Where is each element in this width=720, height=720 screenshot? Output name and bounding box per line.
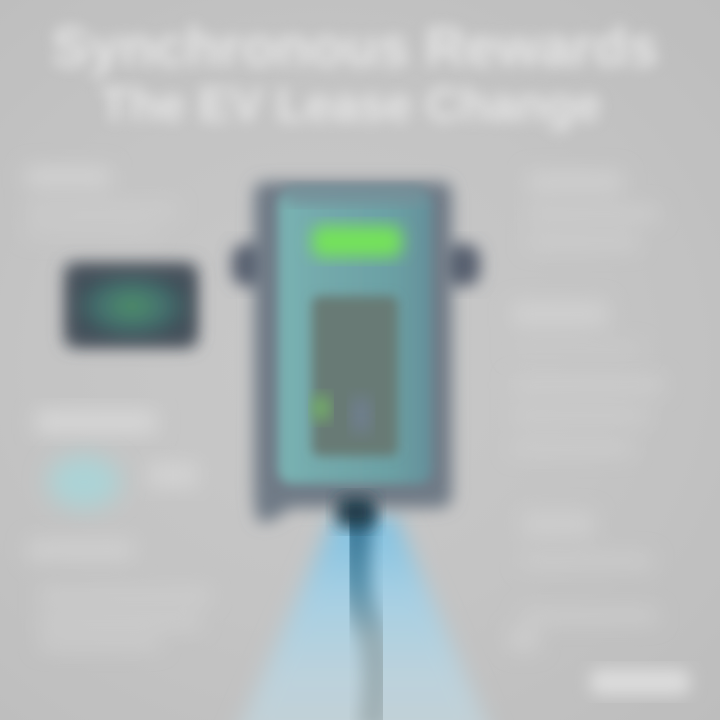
charging cable xyxy=(356,505,377,720)
right column: text block two xyxy=(512,302,642,355)
left column: stat label xyxy=(148,462,198,488)
right column: text block four xyxy=(510,512,657,650)
icon: pale teal gauge xyxy=(48,456,120,508)
title: The EV Lease Change xyxy=(100,79,602,132)
left column: top text block xyxy=(26,167,176,236)
charger green display xyxy=(312,226,402,257)
charger outer body xyxy=(254,182,452,522)
keypad blue key xyxy=(352,398,370,432)
charger side mounts xyxy=(232,244,480,286)
keypad green indicator xyxy=(313,396,329,420)
phone screen xyxy=(73,272,191,340)
charger cable socket xyxy=(337,497,375,527)
phone frame xyxy=(64,262,198,348)
footer badge xyxy=(590,669,690,695)
icon: phone with charge status xyxy=(64,262,198,348)
charger keypad panel xyxy=(312,296,398,456)
right column: text block three xyxy=(512,378,662,454)
icon: wall charger xyxy=(232,182,480,527)
left column: bottom text block xyxy=(28,540,210,648)
title: Synchronous Rewards xyxy=(52,15,658,78)
light beam under charger xyxy=(232,515,496,720)
title xyxy=(52,15,658,133)
right column: text block one xyxy=(528,172,658,248)
charger teal face xyxy=(278,192,432,484)
charger top shade xyxy=(285,186,425,204)
left column: stat heading xyxy=(36,410,156,434)
